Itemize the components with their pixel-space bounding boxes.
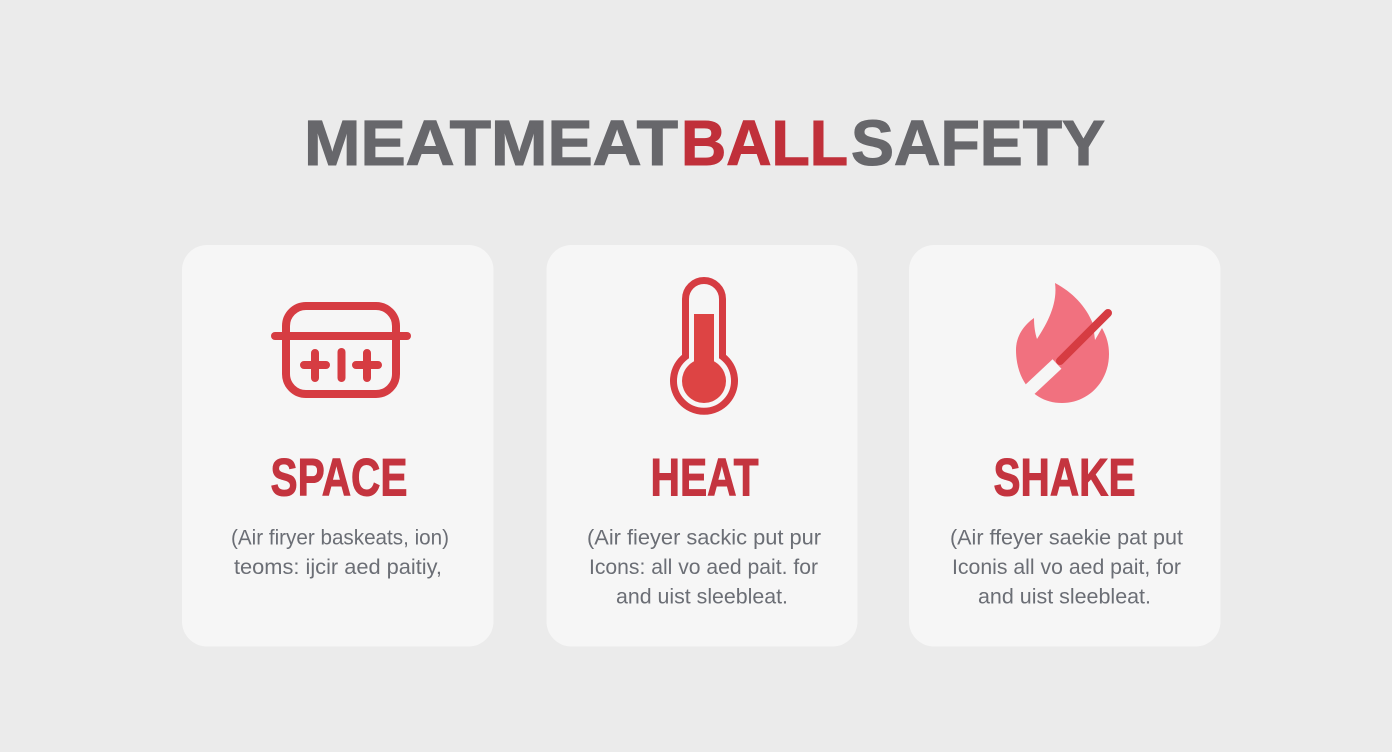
heading: shake: SHAKE	[994, 448, 1136, 508]
text block: space	[231, 526, 449, 579]
panel: shake	[909, 245, 1220, 646]
text block: heat	[587, 526, 821, 608]
text block: heat: and uist sleebleat.	[616, 586, 788, 608]
text block: shake: and uist sleebleat.	[978, 586, 1151, 608]
icon: thermometer	[673, 280, 734, 411]
heading: heat: HEAT	[650, 448, 758, 508]
title: SAFETY	[851, 107, 1105, 179]
title: BALL	[681, 107, 848, 179]
icon: flame with stick	[1016, 283, 1109, 403]
text block: shake: Iconis all vo aed pait, for	[952, 556, 1181, 579]
title: MEATMEAT	[304, 107, 678, 179]
text block: space: (Air firyer baskeats, ion)	[231, 526, 449, 550]
panel: heat	[546, 245, 858, 646]
icon: air fryer basket	[275, 306, 407, 394]
heading: space: SPACE	[270, 448, 408, 508]
title	[304, 107, 1105, 179]
panel: space	[182, 245, 494, 646]
text block: heat: (Air fieyer sackic put pur	[587, 526, 821, 550]
text block: shake: (Air ffeyer saekie pat put	[950, 526, 1183, 550]
text block: space: teoms: ijcir aed paitiy,	[234, 556, 442, 579]
text block: heat: Icons: all vo aed pait. for	[589, 556, 818, 579]
text block: shake	[950, 526, 1183, 608]
